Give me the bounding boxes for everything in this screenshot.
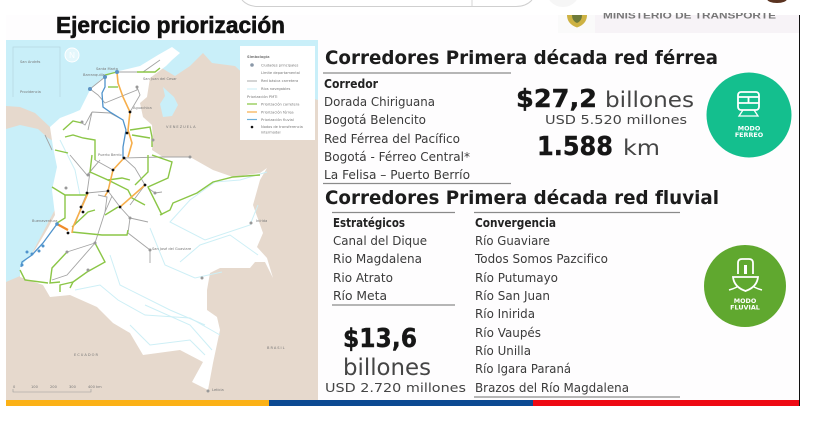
slide right edge: [799, 15, 800, 406]
heading: rail: Corredores Primera década red férrea: [325, 47, 718, 69]
legend: Ríos navegables: [261, 87, 291, 91]
map labels: Leticia: [212, 388, 224, 392]
Colombia: [20, 47, 273, 390]
convergence rivers list: Brazos del Río Magdalena: [475, 381, 629, 395]
title: Ejercicio priorización: [56, 12, 285, 38]
rail investment figure: $27,2: [516, 84, 597, 113]
corridor list: Corredor: [324, 77, 378, 91]
legend: Priorización PMTI: [247, 95, 277, 99]
map labels: BRASIL: [267, 346, 286, 350]
intermodal nodes: [67, 111, 146, 234]
convergence rivers list: Convergencia: [475, 216, 556, 230]
convergence rivers list: Río San Juan: [475, 289, 550, 303]
icon: north compass: N: [69, 51, 75, 60]
scale bar: 200: [50, 385, 58, 389]
panel: river corridors: [325, 187, 719, 397]
map labels: Inírida: [256, 219, 267, 223]
Panama: [6, 106, 52, 140]
scale bar: 0: [13, 385, 16, 389]
corridor list: Dorada Chiriguana: [324, 95, 435, 109]
priority waterways: [21, 77, 126, 267]
ministry header: [567, 13, 799, 33]
icon: rail mode badge: MODO: [738, 124, 761, 132]
map labels: San José del Guaviare: [152, 247, 192, 251]
scale bar: 400 km: [88, 385, 102, 389]
legend: Priorización férrea: [261, 110, 294, 114]
icon: boat: [729, 259, 762, 291]
map labels: Santa Marta: [96, 67, 118, 71]
strategic rivers list: Rio Atrato: [333, 271, 393, 285]
corridor list: Bogotá Belencito: [324, 113, 426, 127]
scale bar: [13, 385, 102, 392]
priority roads: [20, 68, 260, 292]
icon: train: [738, 92, 759, 116]
map labels: [20, 60, 286, 392]
icon: north compass: [65, 48, 79, 62]
river investment figure: USD 2.720 millones: [325, 381, 466, 395]
rail length figure: [537, 132, 660, 162]
corridor list: [324, 77, 470, 182]
priority rail: [57, 72, 145, 233]
legend: Límite departamental: [261, 71, 300, 75]
convergence rivers list: Todos Somos Pazcifico: [474, 252, 608, 266]
map labels: Providencia: [20, 90, 41, 94]
convergence rivers list: Río Inirida: [475, 307, 535, 321]
convergence rivers list: Río Guaviare: [475, 234, 550, 248]
scale bar: 100: [31, 385, 39, 389]
strategic rivers list: Estratégicos: [333, 216, 405, 230]
map labels: San Juan del Cesar: [143, 77, 177, 81]
legend: Ciudades principales: [261, 64, 298, 68]
rail investment figure: USD 5.520 millones: [545, 113, 687, 127]
river investment figure: $13,6: [343, 324, 417, 354]
map labels: San Andrés: [20, 60, 41, 64]
icon: river mode badge: FLUVIAL: [730, 304, 760, 312]
map of Colombia: [6, 40, 318, 400]
Lake Maracaibo: [160, 87, 178, 117]
rail length figure: 1.588: [537, 132, 613, 162]
river investment figure: billones: [343, 355, 431, 381]
legend: Priorización fluvial: [261, 118, 294, 122]
map labels: Barranquilla: [83, 73, 105, 77]
map labels: VENEZUELA: [166, 125, 197, 129]
strategic rivers list: Rio Magdalena: [333, 252, 422, 266]
flag stripe: [6, 400, 800, 406]
corridor list: Bogotá - Férreo Central*: [324, 150, 470, 164]
legend: Priorización carretera: [261, 102, 299, 106]
cities: [20, 70, 252, 392]
icon: rail mode badge: FERREO: [735, 131, 764, 139]
convergence rivers list: Río Vaupés: [475, 326, 541, 340]
rail length figure: km: [623, 136, 660, 160]
map labels: Aguachica: [133, 106, 152, 110]
convergence rivers list: Río Unilla: [475, 344, 531, 358]
rivers: [60, 140, 267, 355]
strategic rivers list: Canal del Dique: [333, 234, 427, 248]
corridor list: Red Férrea del Pacífico: [324, 132, 460, 146]
sea: [6, 40, 318, 282]
heading: river: Corredores Primera década red fluvial: [325, 187, 719, 209]
convergence rivers list: Río Igara Paraná: [475, 362, 571, 376]
ministry header: MINISTERIO DE TRANSPORTE: [603, 10, 776, 22]
corridor list: La Felisa – Puerto Berrío: [324, 168, 470, 182]
strategic rivers list: Río Meta: [333, 289, 387, 303]
rail investment figure: billones: [605, 88, 694, 112]
map labels: Buenaventura: [32, 219, 57, 223]
basic road network: [45, 60, 190, 280]
convergence rivers list: Río Putumayo: [475, 271, 558, 285]
icon: river mode badge: MODO: [734, 297, 757, 305]
inset islands: [13, 47, 60, 97]
icon: rail mode badge: [706, 72, 792, 158]
browser search bar: [242, 0, 787, 7]
map labels: ECUADOR: [74, 353, 99, 357]
legend: intermodal: [261, 130, 280, 134]
strategic rivers list: [333, 216, 427, 303]
legend: [240, 46, 315, 140]
convergence rivers list: [474, 216, 629, 395]
neighbouring countries: [6, 53, 318, 400]
river investment figure: [325, 324, 466, 395]
icon: river mode badge: [704, 245, 786, 327]
map labels: Puerto Berrío: [98, 153, 122, 157]
legend: Red básica carretera: [261, 79, 298, 83]
icon: coat of arms: [567, 15, 587, 28]
panel: rail corridors: [323, 47, 718, 184]
legend: Nodos de transferencia: [261, 125, 303, 129]
rail investment figure: [516, 84, 694, 127]
legend: Simbología: [247, 55, 270, 59]
scale bar: 300: [69, 385, 77, 389]
